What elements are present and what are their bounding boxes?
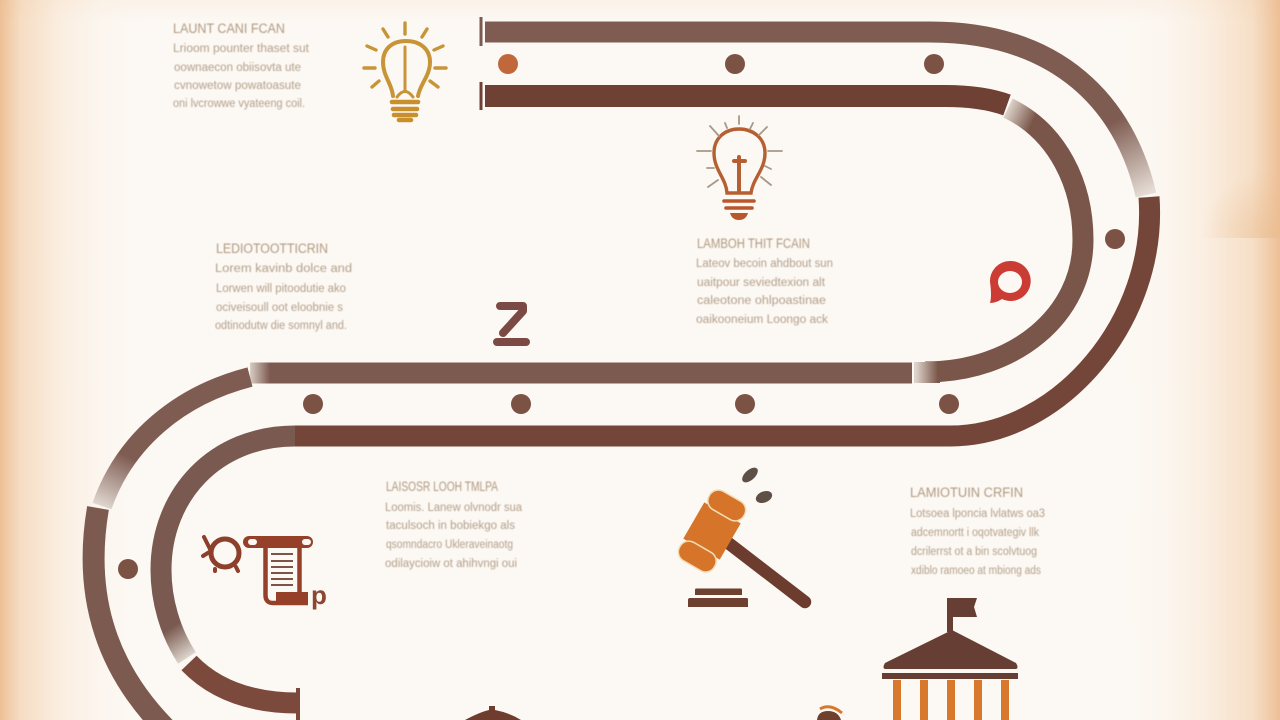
gavel head body [683, 502, 741, 560]
body 3 [696, 258, 833, 326]
ring [211, 539, 239, 567]
text block 5 [910, 485, 1045, 577]
dot: start [498, 54, 518, 74]
bulb base [724, 201, 754, 208]
pin body [990, 261, 1031, 303]
rays [364, 23, 446, 87]
heading 5: LAMIOTUIN CRFIN [910, 485, 1023, 500]
rays [697, 116, 782, 187]
body 5: xdiblo ramoeo at mbiong ads [911, 565, 1041, 577]
icon: scroll document [243, 536, 327, 610]
dot: left bend [118, 559, 138, 579]
body 3: caleotone ohlpoastinae [697, 295, 826, 307]
columns [893, 680, 1009, 720]
dot: top lane 3 [924, 54, 944, 74]
roof [884, 630, 1018, 669]
entablature [882, 673, 1018, 679]
filament [397, 47, 413, 97]
scroll holes [251, 539, 308, 545]
dot: middle lane 2 [735, 394, 755, 414]
dot: right bend [1105, 229, 1125, 249]
body 1: oni lvcrowwe vyateeng coil. [173, 98, 305, 110]
scroll body [266, 548, 308, 603]
body 1: cvnowetow powatoasute [174, 80, 301, 92]
body 5 [910, 508, 1045, 577]
heading 1: LAUNT CANI FCAN [173, 21, 285, 36]
road: lower left inner curve [161, 436, 295, 658]
body 5: adcemnortt i oqotvategiv llk [911, 527, 1039, 539]
scroll top roll [243, 536, 313, 548]
road: outer right curve and lower straight [295, 197, 1150, 436]
icon: partial gavel at bottom edge [817, 707, 842, 720]
ribbon and feet [203, 537, 238, 571]
icon: partial dome at bottom edge [465, 706, 521, 720]
body 4: qsomndacro Ukleraveinaotg [386, 539, 513, 551]
body 5: dcrilerrst ot a bin scolvtuog [911, 546, 1037, 558]
scroll text lines [271, 554, 293, 585]
road end cap: second lane [480, 82, 482, 110]
impact mark upper [740, 465, 760, 485]
road: outer left curve [94, 508, 167, 720]
icon: gold light bulb [364, 23, 446, 120]
dot: top lane 2 [725, 54, 745, 74]
gavel handle [727, 542, 805, 602]
bulb base [392, 102, 418, 120]
road: inner right curve [925, 108, 1083, 372]
bulb outline [383, 41, 430, 96]
gavel head [674, 486, 750, 576]
milestone dots [118, 54, 1125, 579]
icon: seal ring [203, 537, 239, 571]
impact mark lower [754, 489, 774, 505]
icon: courthouse [882, 598, 1018, 720]
bulb tip [730, 213, 748, 220]
body 3: oaikooneium Loongo ack [696, 314, 828, 326]
filament [734, 157, 745, 191]
body 5: Lotsoea lponcia lvlatws oa3 [910, 508, 1045, 520]
flag [947, 598, 977, 632]
scroll bottom roll [276, 592, 308, 605]
road end cap: top lane [480, 17, 482, 46]
body 1: Lrioom pounter thaset sut [173, 43, 310, 55]
road: top lane inner straight [485, 96, 1007, 105]
text block 3 [696, 236, 833, 326]
road: middle lane upper straight [250, 362, 912, 384]
road end cap: bottom [296, 688, 300, 720]
road: connector at right of middle lane [914, 362, 940, 383]
heading 4: LAISOSR LOOH TMLPA [386, 479, 498, 494]
body 4: Loomis. Lanew olvnodr sua [385, 502, 523, 514]
heading 2: LEDIOTOOTTICRIN [216, 241, 328, 256]
icon: red location pin [990, 261, 1031, 303]
road: upper left curve [102, 377, 250, 506]
gavel stub brown [817, 711, 841, 720]
dot: middle lane 4 [303, 394, 323, 414]
dot: middle lane 1 [939, 394, 959, 414]
icon: gavel [674, 465, 805, 607]
gavel head bottom cap [675, 537, 720, 576]
heading 3: LAMBOH THIT FCAIN [697, 236, 810, 251]
body 1 [173, 43, 310, 110]
body 3: Lateov becoin ahdbout sun [696, 258, 833, 270]
gavel sound block [688, 588, 748, 607]
gavel stub orange band [820, 707, 842, 713]
icon: number two glyph [497, 306, 526, 342]
body 1: oownaecon obiisovta ute [174, 62, 301, 74]
body 2: ociveisoull oot eloobnie s [216, 302, 343, 314]
body 2 [215, 263, 352, 332]
bulb outline [714, 129, 765, 193]
pin hole [998, 271, 1022, 293]
body 4: odilaycioiw ot ahihvngi oui [385, 558, 517, 570]
letter p: p [311, 580, 327, 610]
icon: rust light bulb [697, 116, 782, 220]
dot: middle lane 3 [511, 394, 531, 414]
body 3: uaitpour seviedtexion alt [697, 277, 826, 289]
body 2: Lorem kavinb dolce and [215, 263, 352, 275]
road: top lane outer curve [485, 32, 1146, 195]
gavel head top cap [704, 486, 749, 525]
body 4 [385, 502, 523, 570]
text block 4 [385, 479, 523, 570]
body 4: taculsoch in bobiekgo als [386, 520, 515, 532]
body 2: odtinodutw die somnyl and. [215, 320, 347, 332]
body 2: Lorwen will pitoodutie ako [216, 283, 346, 295]
text block 1 [173, 21, 310, 110]
road: bottom inner curve [189, 663, 298, 703]
text block 2 [215, 241, 352, 332]
